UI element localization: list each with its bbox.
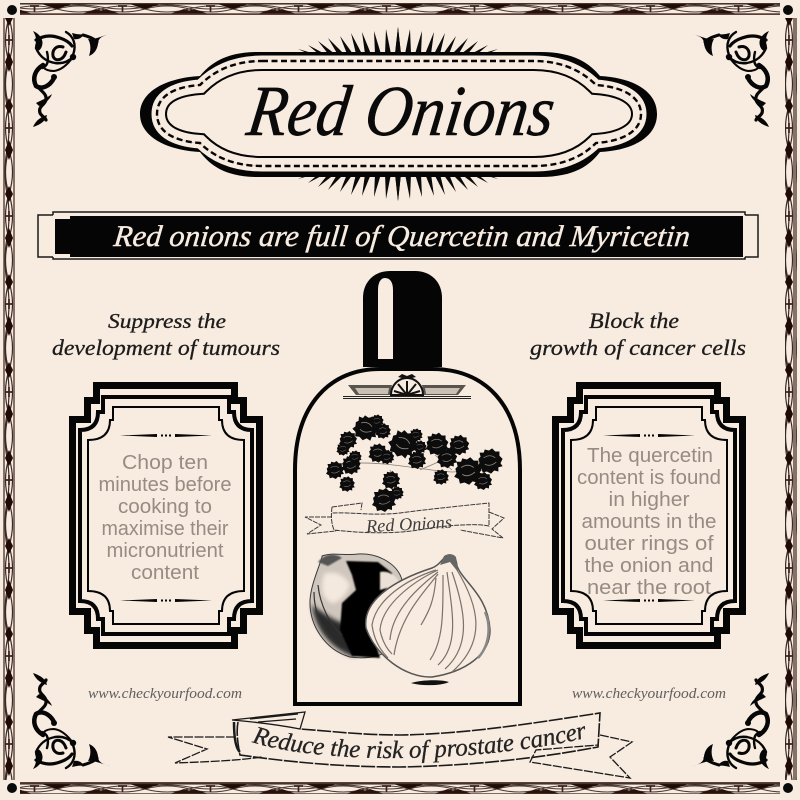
plaque inner shape [157, 61, 641, 166]
left frame text: maximise their [102, 518, 229, 540]
panel: right frame [556, 386, 742, 646]
right frame text: outer rings of [584, 533, 714, 555]
onion illustration [310, 554, 490, 685]
banner [38, 212, 758, 259]
bottle emblem [343, 374, 471, 398]
sunburst rays [298, 27, 498, 201]
flower cluster [326, 412, 503, 512]
small ribbon [305, 503, 504, 538]
right heading: Block the [589, 308, 679, 333]
bottom ribbon [168, 711, 634, 779]
panel: left frame [72, 386, 260, 646]
left frame text [98, 452, 232, 584]
left frame text: Chop ten [122, 452, 208, 474]
left heading: development of tumours [52, 335, 280, 360]
halved onion [366, 554, 490, 685]
right frame text: the onion and [584, 555, 714, 577]
right frame text: in higher [608, 489, 690, 511]
right frame text: content is found [577, 467, 721, 489]
right frame text [577, 445, 721, 599]
plaque outer shape [140, 52, 657, 177]
cap highlight [378, 278, 393, 359]
title plaque [140, 27, 657, 201]
right frame text: amounts in the [582, 511, 716, 533]
left frame text: micronutrient [106, 540, 224, 562]
right frame text: The quercetin [587, 445, 713, 467]
bottle body [295, 369, 520, 704]
left url: www.checkyourfood.com [88, 686, 242, 702]
right heading [530, 308, 746, 360]
dark onion [310, 554, 402, 658]
left heading [52, 309, 280, 360]
right heading: growth of cancer cells [530, 335, 746, 360]
left frame text: cooking to [118, 496, 212, 518]
corner ornament: bottom right [692, 673, 769, 769]
corner ornament: top right [692, 31, 769, 127]
right url: www.checkyourfood.com [572, 686, 726, 702]
left heading: Suppress the [108, 309, 226, 333]
title: Red Onions [242, 71, 560, 151]
corner ornament: bottom left [33, 673, 110, 769]
bottle cap [363, 271, 442, 367]
right frame text: near the root [587, 577, 711, 599]
banner text: Red onions are full of Quercetin and Myricetin [111, 219, 692, 253]
left frame text: minutes before [98, 474, 232, 496]
bottle [295, 271, 520, 704]
corner ornament: top left [33, 31, 110, 127]
left frame text: content [131, 562, 199, 584]
bottom ribbon text: Reduce the risk of prostate cancer [252, 726, 586, 764]
small ribbon text: Red Onions [364, 512, 452, 536]
